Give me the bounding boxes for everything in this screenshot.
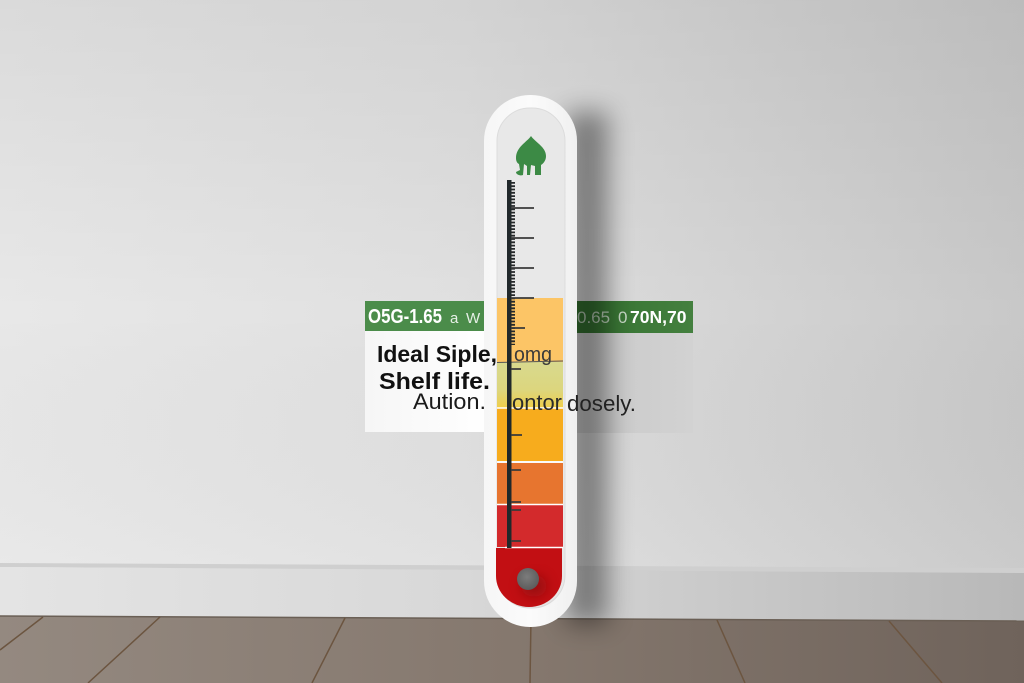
right green header	[570, 301, 693, 333]
callout body text: Ideal Siple,	[377, 341, 497, 367]
left green header: W	[466, 310, 481, 327]
callout body text: dosely.	[567, 391, 636, 416]
callout body text: Aution.	[413, 389, 486, 414]
left green header	[365, 301, 490, 331]
colour gauge segments	[496, 298, 563, 607]
thermometer body	[484, 95, 577, 627]
callout body text: ontor	[512, 390, 562, 415]
callout panel right	[570, 301, 693, 433]
left green header: a	[450, 310, 459, 327]
left green header: O5G-1.65	[368, 306, 442, 328]
wooden floor	[0, 616, 1024, 683]
thermometer cast shadow	[566, 112, 608, 624]
callout body text: omg	[514, 344, 552, 366]
baseboard	[0, 563, 1024, 621]
icon: green leaf drop	[516, 136, 546, 175]
temperature scale	[507, 180, 534, 548]
thermometer inner channel	[497, 108, 565, 608]
callout body text	[377, 341, 636, 416]
callout panel left	[365, 301, 490, 432]
callout body text: Shelf life.	[379, 368, 490, 394]
right green header: 0.65	[577, 308, 610, 327]
right green header: 0	[618, 308, 627, 327]
right green header: 70N,70	[630, 307, 687, 327]
thermometer bulb knob	[517, 568, 547, 597]
